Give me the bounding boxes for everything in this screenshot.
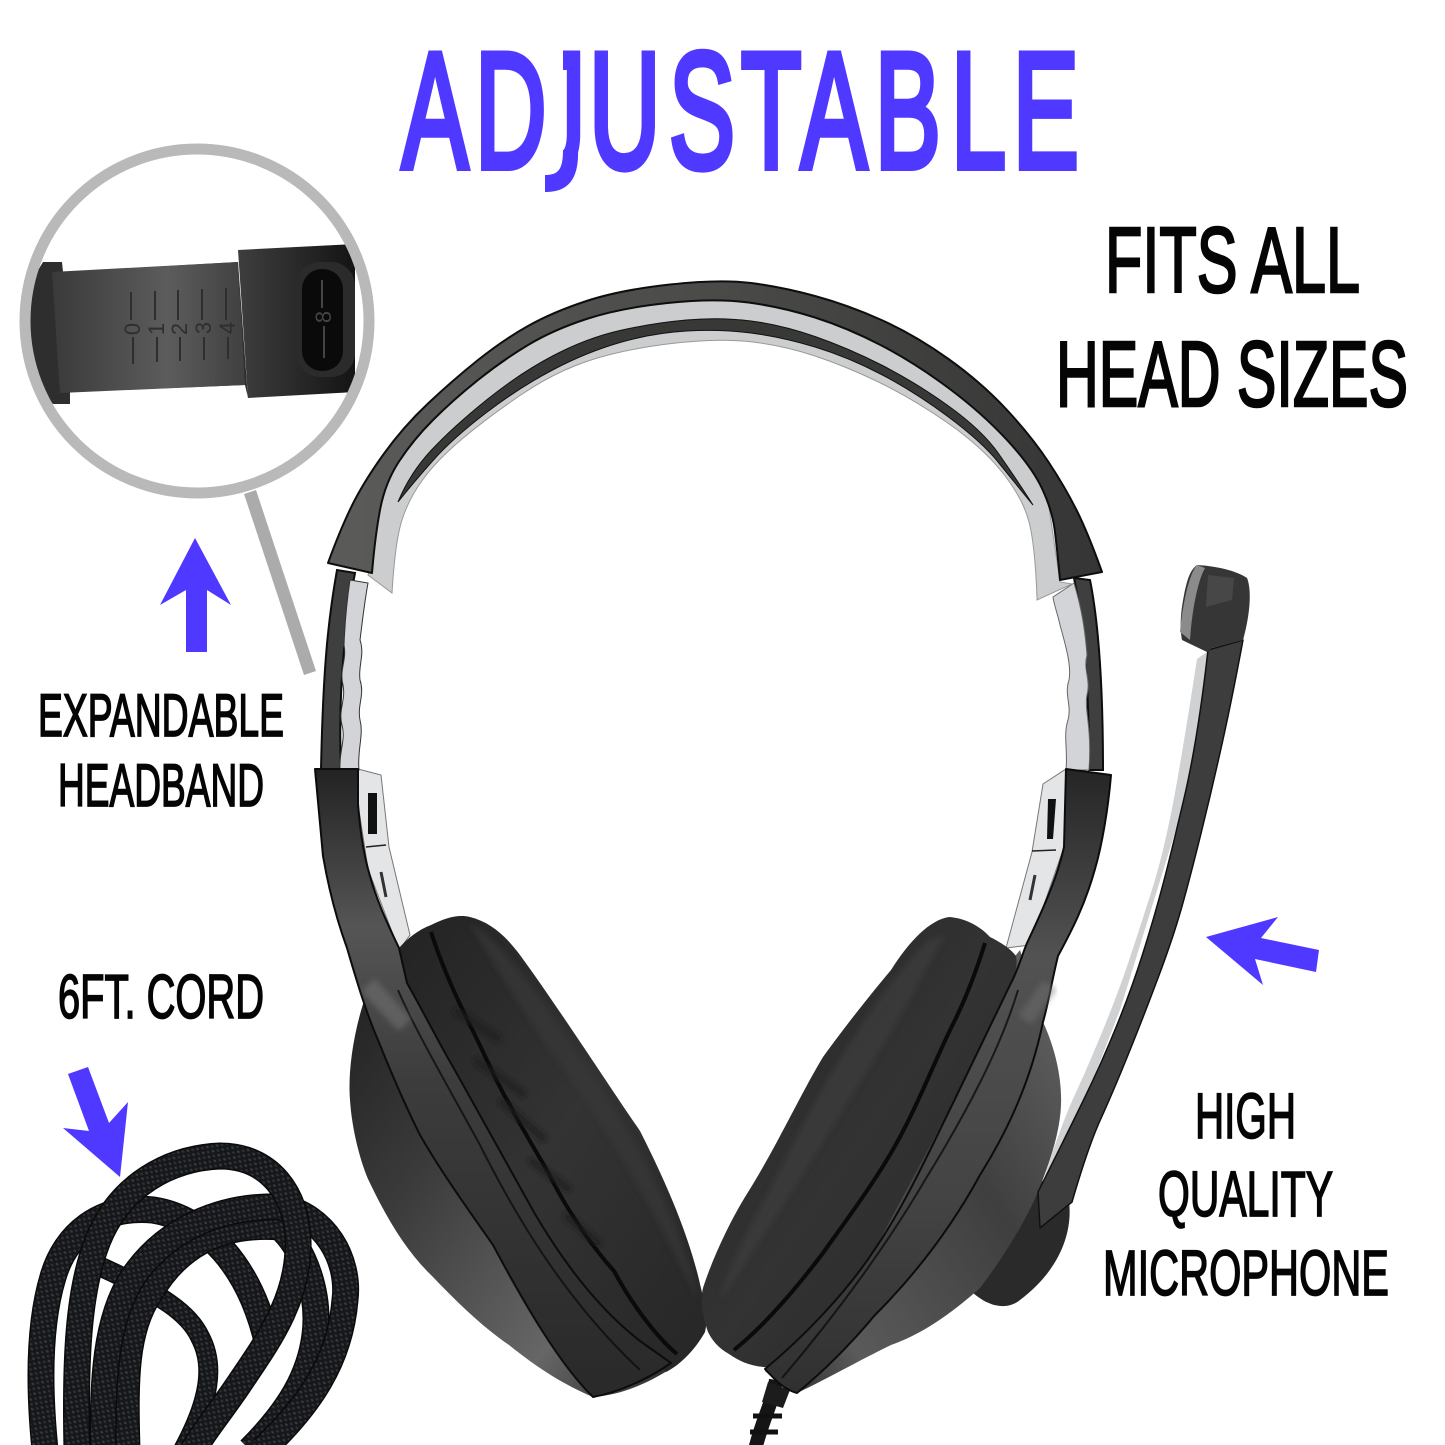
headband silver layer <box>368 290 1072 600</box>
title: J <box>536 18 585 203</box>
cord stem <box>750 1380 790 1445</box>
right arm slider <box>1053 578 1103 770</box>
headband inner slot <box>398 319 1033 505</box>
magnifier handle <box>244 490 316 675</box>
arrow: to cord <box>63 1067 128 1177</box>
scale numerals <box>120 311 336 335</box>
text: high quality microphone: QUALITY <box>1158 1158 1333 1230</box>
boom dark body <box>1038 640 1243 1228</box>
text: expandable headband <box>38 682 284 819</box>
scale numerals: 1 <box>144 323 169 335</box>
right yoke and ring <box>765 769 1111 1393</box>
text: high quality microphone: HIGH <box>1195 1080 1296 1152</box>
headband outer dark layer <box>328 281 1102 580</box>
scale numerals: 4 <box>215 322 240 334</box>
mic capsule <box>1181 565 1250 652</box>
text: expandable headband: EXPANDABLE <box>38 682 284 749</box>
right cushion <box>702 917 1017 1367</box>
scale numerals: 2 <box>167 323 192 335</box>
title: AD <box>402 18 547 203</box>
mic pivot <box>970 1180 1070 1306</box>
left arm slider <box>321 570 368 770</box>
left yoke and ring <box>315 769 671 1397</box>
braided cord <box>41 1156 346 1445</box>
scale numerals: 3 <box>191 322 216 334</box>
strap close-up <box>20 244 355 404</box>
silver yoke tabs <box>358 769 1066 950</box>
headset <box>315 281 1250 1445</box>
title <box>399 48 1077 192</box>
left cup back <box>350 950 672 1397</box>
text: fits all head sizes <box>1056 208 1408 426</box>
text: cord length: 6FT. CORD <box>58 963 264 1032</box>
text: high quality microphone <box>1103 1080 1389 1309</box>
title: USTABLE <box>589 18 1079 203</box>
scale numerals: 0 <box>120 323 145 335</box>
arrow: to microphone <box>1206 917 1319 985</box>
scale ticks <box>131 280 324 364</box>
mic boom <box>1038 565 1250 1228</box>
right cup back <box>765 950 1061 1393</box>
arrow: up to magnifier <box>160 538 231 652</box>
magnifier: headband adjustment detail <box>20 149 369 675</box>
scale numerals: 8 <box>311 311 336 323</box>
text: expandable headband: HEADBAND <box>58 752 264 819</box>
boom silver edge <box>1043 650 1210 1190</box>
magnifier ring <box>25 149 369 493</box>
left cushion <box>399 916 706 1372</box>
